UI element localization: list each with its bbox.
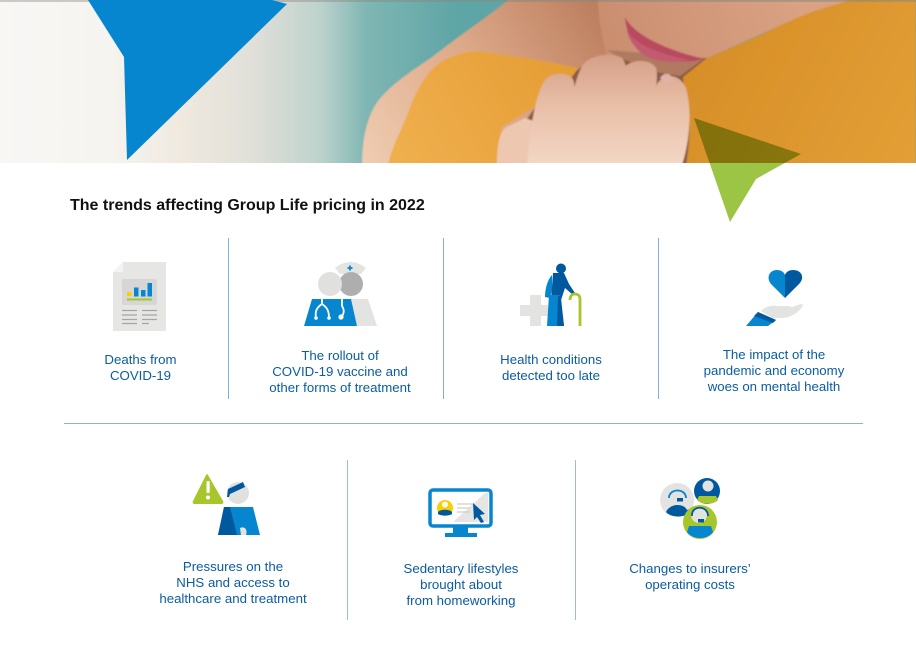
icon: report document	[113, 262, 166, 331]
green triangle	[694, 118, 801, 222]
label: The impact of the	[723, 347, 825, 362]
label: COVID-19 vaccine and	[272, 364, 408, 379]
label	[629, 561, 751, 592]
icon: heart in hand	[746, 270, 803, 326]
label: Pressures on the	[183, 559, 283, 574]
label	[269, 348, 411, 395]
label: NHS and access to	[176, 575, 290, 590]
shadow behind hand	[496, 58, 707, 165]
label: healthcare and treatment	[159, 591, 307, 606]
lips	[625, 17, 704, 62]
shoulder	[683, 0, 916, 165]
icon: computer monitor	[428, 488, 493, 537]
panel: COVID-19 vaccine rollout	[269, 262, 411, 395]
arm	[362, 0, 620, 165]
divider	[228, 238, 229, 399]
label: COVID-19	[110, 368, 171, 383]
label: operating costs	[645, 577, 735, 592]
label: Deaths from	[104, 352, 177, 367]
sleeve	[388, 51, 578, 165]
hero photo	[0, 0, 916, 163]
face	[598, 0, 850, 78]
label	[104, 352, 177, 383]
label	[159, 559, 307, 606]
label: Sedentary lifestyles	[404, 561, 518, 576]
panel: insurers' operating costs	[629, 478, 751, 592]
label	[500, 352, 602, 383]
panel: health conditions	[500, 264, 602, 383]
label: brought about	[420, 577, 502, 592]
chin	[607, 50, 705, 76]
label: pandemic and economy	[704, 363, 844, 378]
icon: three call-centre agents	[660, 478, 720, 539]
hand	[497, 118, 545, 165]
label: other forms of treatment	[269, 380, 411, 395]
panel: mental health	[704, 270, 844, 394]
divider	[658, 238, 659, 399]
label: from homeworking	[406, 593, 515, 608]
label: woes on mental health	[708, 379, 840, 394]
divider	[443, 238, 444, 399]
panel: deaths from COVID-19	[104, 262, 177, 383]
blue triangle	[88, 0, 287, 160]
label: detected too late	[502, 368, 600, 383]
label: Changes to insurers’	[629, 561, 751, 576]
label	[404, 561, 518, 608]
icon: elderly person with cane	[520, 264, 582, 326]
icon: doctor and nurse	[304, 262, 377, 326]
divider	[347, 460, 348, 620]
panel: NHS pressures	[159, 474, 307, 606]
icon: warning and patient	[192, 474, 260, 535]
panel: sedentary lifestyles	[404, 488, 518, 608]
label: Health conditions	[500, 352, 602, 367]
divider	[575, 460, 576, 620]
label: The rollout of	[301, 348, 379, 363]
title: The trends affecting Group Life pricing in 2022	[70, 197, 425, 214]
label	[704, 347, 844, 394]
